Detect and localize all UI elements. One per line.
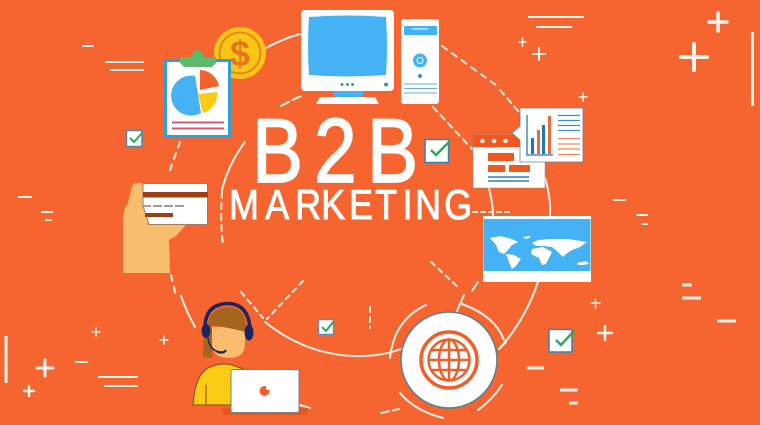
icon: clipboard with pie chart	[166, 50, 230, 136]
checkbox: bottom right	[549, 330, 574, 352]
icon: bar chart card	[512, 108, 583, 162]
icon: support agent with headset	[193, 304, 308, 415]
checkbox: bottom centre	[318, 320, 334, 334]
icon: dollar coin	[214, 27, 266, 79]
checkbox: left	[126, 130, 142, 146]
icon: desktop monitor	[301, 10, 394, 104]
network rings	[169, 34, 550, 413]
title	[229, 100, 472, 229]
globe orbit arcs	[390, 295, 506, 418]
icon: computer tower	[401, 19, 439, 104]
icon: dollar coin: $	[230, 33, 250, 74]
title: B2B	[252, 100, 418, 201]
icon: world map	[483, 216, 591, 282]
icon: browser window	[473, 135, 545, 188]
title: MARKETING	[229, 182, 472, 229]
icon: hand holding credit card	[123, 183, 208, 273]
icon: globe badge	[401, 312, 497, 408]
icon: laptop	[231, 370, 299, 412]
checkbox: centre right	[425, 140, 450, 162]
